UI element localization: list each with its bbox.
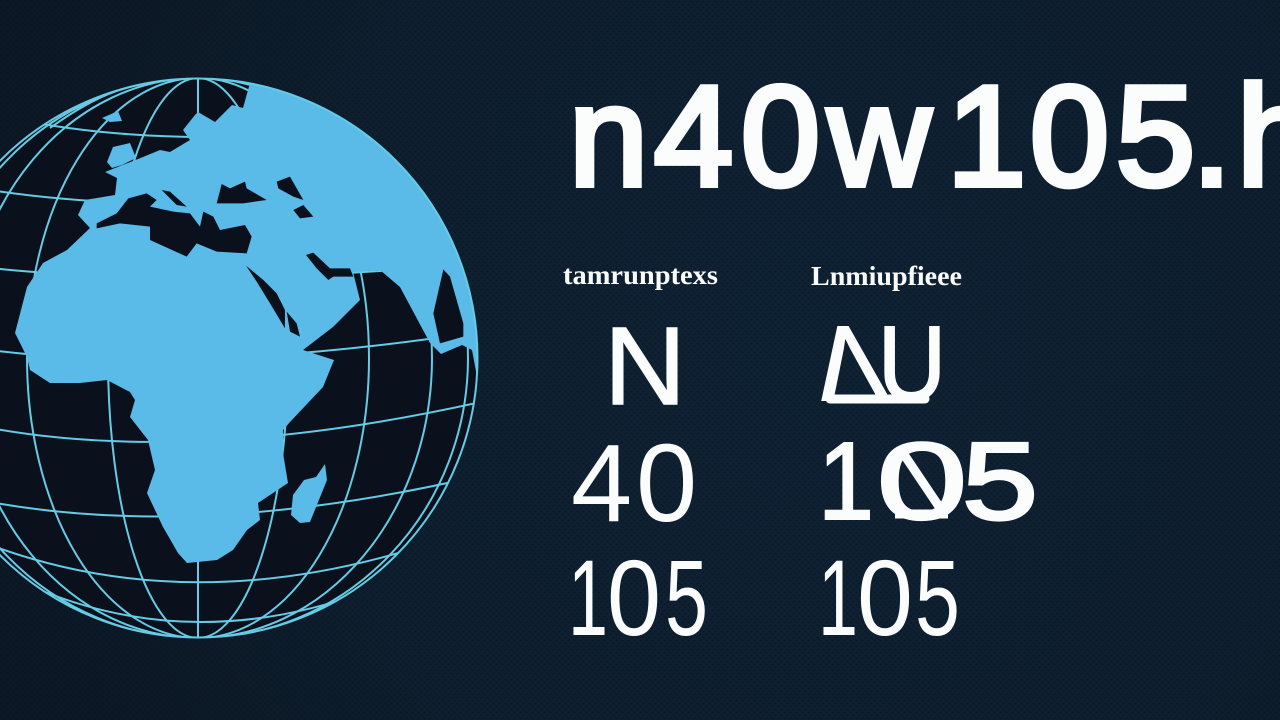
left value 105 [568,537,708,658]
right longitude value 105 bold [818,420,1038,543]
right column merged letters NU: Λ [805,304,894,423]
sea: Bay of Bengal [433,269,463,343]
right longitude value 105 bold: 0 [876,420,968,543]
land: Eurasia and Africa [15,83,479,563]
left value 105: 0 [607,537,661,658]
right longitude value 105 bold: 5 [962,420,1038,543]
land: British Isles [107,143,136,168]
right longitude value 105 bold: 1 [818,420,874,543]
globe [0,78,490,638]
sea: Mediterranean [97,193,252,257]
left value 105: 5 [665,537,708,658]
land: Madagascar [291,464,327,523]
right value 105: 0 [857,537,913,658]
right column label: Lnmiupfieee [811,261,962,291]
land: Iceland [102,111,122,122]
sea: Persian Gulf [306,253,353,280]
left latitude value 40: 40 [571,422,697,545]
right value 105 [818,537,960,658]
right column merged letters NU: U [878,305,946,423]
right value 105: 5 [915,537,960,658]
sea: Black Sea [217,182,267,203]
right value 105: 1 [818,537,858,658]
left column letter N: N [604,305,686,428]
left value 105: 1 [568,537,608,658]
sea: Caspian [277,177,313,218]
sea: Red Sea [246,266,300,337]
right column merged letters NU [805,304,946,423]
left column label: tamrunptexs [563,260,718,290]
sea: Adriatic [162,190,187,207]
